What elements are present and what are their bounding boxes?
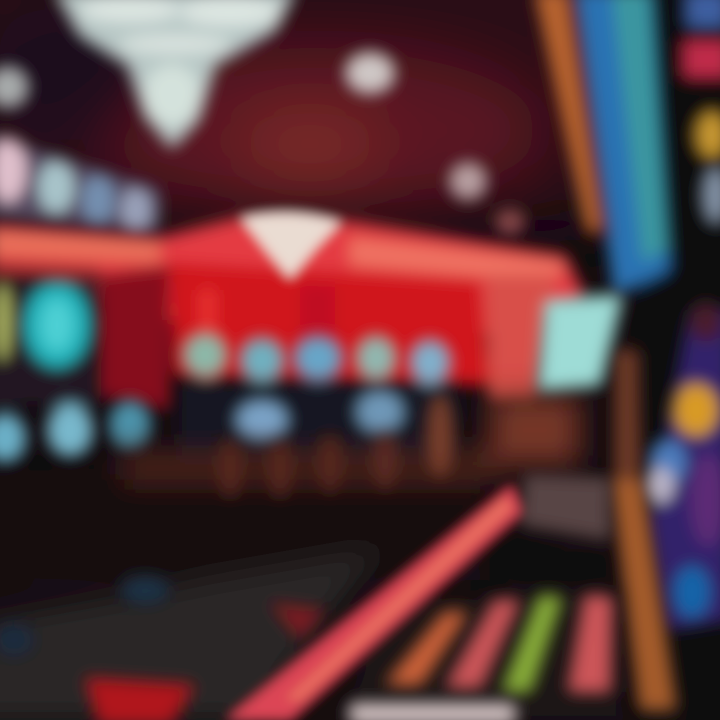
right side strips [535, 0, 720, 720]
red diagonal rail [225, 485, 522, 720]
right colourful column [646, 302, 720, 630]
red floor mark and bottom light [85, 603, 515, 720]
wooden pillar [612, 350, 676, 710]
ceiling [0, 0, 600, 220]
console on the right [345, 475, 620, 720]
teal lit box [538, 295, 622, 390]
left dark panels and screens [0, 280, 150, 462]
coloured stripes [385, 595, 612, 692]
chandelier [55, 0, 295, 148]
central machines [178, 333, 458, 485]
seats [0, 395, 580, 720]
ceiling lights [0, 53, 524, 234]
central white light [240, 212, 342, 280]
red band [0, 218, 585, 410]
upper left screens [0, 135, 160, 232]
